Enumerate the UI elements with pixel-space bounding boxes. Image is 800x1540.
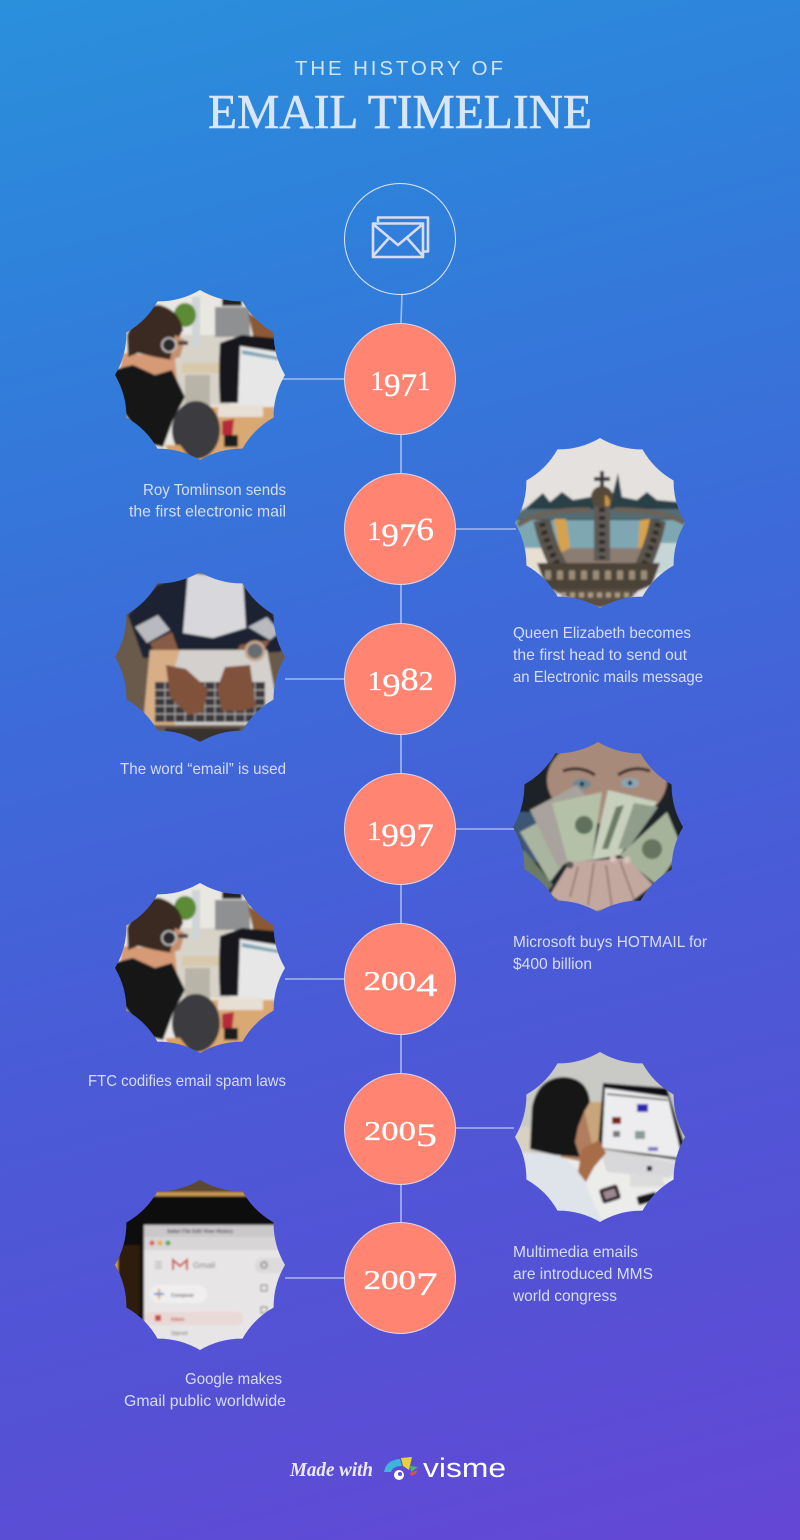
year node: 1971: 1 [370,366,384,396]
caption: 1976 [513,625,703,686]
photo: gmail on laptop screen (2007) [115,1180,285,1350]
caption: 1997: Microsoft buys HOTMAIL for [513,934,708,951]
year node: 1997: 997 [381,818,434,854]
caption: 2004: FTC codifies email spam laws [88,1073,286,1090]
photo: gmail on laptop screen (2007): Compose [171,1293,194,1299]
year node: 1976 [344,474,456,584]
year node: 1997 [344,774,456,884]
caption: 2007 [124,1371,286,1410]
photo: person holding dollars (1997) [513,742,683,912]
year node: 2004: 200 [363,966,416,996]
photo: gmail on laptop screen (2007): Inbox [171,1317,185,1323]
year node: 1982: 2 [419,667,433,697]
year node: 1982: 1 [368,667,382,697]
caption: 1982: The word “email” is used [120,761,286,778]
year node: 1971: 97 [384,368,417,404]
caption: 1971 [129,482,286,520]
photo: crown (1976) [515,438,685,608]
year node: 1971: 1 [417,366,430,396]
year node: 1976: 1 [367,517,381,547]
year node: 2004 [344,924,456,1034]
year node: 1997: 1 [367,817,381,847]
subtitle: the history of: THE HISTORY OF [295,57,503,80]
photo: man at office desk (1971) [115,290,285,460]
footer: made with visme [289,1453,506,1483]
footer: made with visme: visme [423,1453,506,1483]
year node: 2007: 200 [363,1265,416,1295]
heading: email timeline: EMAIL TIMELINE [208,84,592,139]
year node: 1971 [344,324,456,434]
year node: 2005 [344,1074,456,1184]
year node: 1976: 6 [416,512,434,548]
caption: 2007: Gmail public worldwide [124,1393,286,1410]
year node: 1982: 8 [400,661,419,698]
year node: 1982: 9 [382,667,400,704]
photo: gmail on laptop screen (2007): Gmail [193,1260,215,1270]
year node: 1982 [344,624,456,734]
icon: envelope in circle [344,184,456,294]
year node: 2005: 5 [416,1117,437,1154]
photo: hands typing on laptop (1982) [115,572,285,742]
caption: 1976: Queen Elizabeth becomes [513,625,691,642]
caption: 2005: world congress [512,1288,617,1305]
caption: 1971: the first electronic mail [129,504,286,520]
caption: 1997 [513,934,708,973]
icon: visme logo [384,1457,418,1480]
photo: man looking at imac (2005) [515,1052,685,1222]
caption: 1976: the first head to send out [513,647,688,664]
photo: gmail on laptop screen (2007): Safari File Edit View History [167,1229,233,1235]
caption: 1997: $400 billion [513,956,592,973]
photo: man at office desk (2004) [115,883,285,1053]
year node: 2007 [344,1222,456,1334]
year node: 2005: 200 [364,1116,416,1146]
year node: 2007: 7 [416,1267,438,1303]
caption: 1976: an Electronic mails message [513,669,703,686]
caption: 1971: Roy Tomlinson sends [143,482,286,499]
timeline connector lines [282,294,516,1278]
caption: 2007: Google makes [185,1371,282,1388]
photo: gmail on laptop screen (2007): Starred [171,1331,188,1337]
year node: 1976: 97 [381,518,416,554]
caption: 2005 [512,1244,653,1305]
footer: made with visme: Made with [289,1459,373,1481]
year node: 2004: 4 [416,968,438,1004]
caption: 2005: Multimedia emails [513,1244,638,1261]
title [208,57,592,139]
caption: 2005: are introduced MMS [513,1266,653,1283]
